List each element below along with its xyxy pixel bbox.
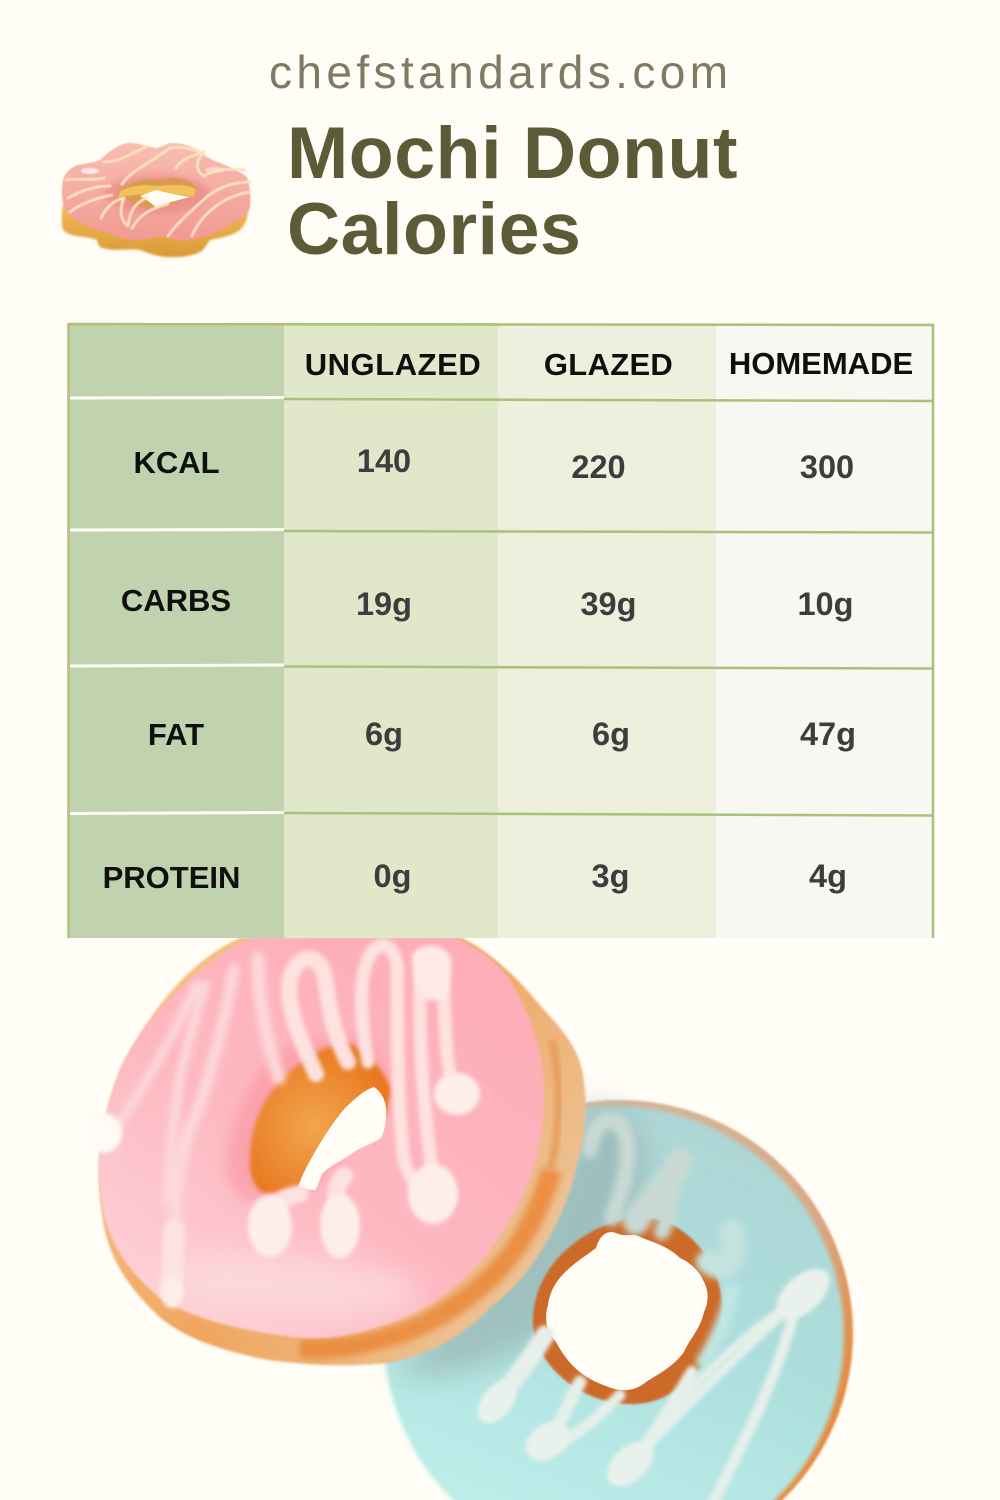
title: Mochi Donut xyxy=(287,111,738,194)
photo: pink glazed donut xyxy=(86,938,586,1365)
table columns background xyxy=(68,323,934,938)
row: kcal: KCAL xyxy=(133,445,220,480)
row: protein: 3g xyxy=(592,858,629,894)
row: protein xyxy=(103,858,847,895)
table grid lines xyxy=(68,323,934,938)
column headings: UNGLAZED xyxy=(305,347,481,382)
row: fat: 6g xyxy=(592,716,630,752)
row: fat: FAT xyxy=(148,717,204,752)
row: carbs xyxy=(121,583,854,622)
row: protein: 0g xyxy=(374,858,411,894)
row: carbs: 10g xyxy=(797,586,854,622)
icon: small pink mochi donut xyxy=(62,143,250,257)
column headings: GLAZED xyxy=(544,347,673,382)
row: fat xyxy=(148,716,856,752)
column headings: HOMEMADE xyxy=(729,346,913,381)
row: carbs: CARBS xyxy=(121,583,231,618)
row: kcal: 140 xyxy=(357,443,411,479)
row: protein: 4g xyxy=(809,858,847,894)
column headings xyxy=(305,346,913,382)
row: fat: 6g xyxy=(365,716,403,752)
title: Calories xyxy=(287,187,581,270)
row: kcal: 220 xyxy=(571,449,626,485)
row: fat: 47g xyxy=(800,716,856,752)
panel: nutrition table xyxy=(68,323,934,938)
row: kcal xyxy=(133,443,854,485)
row: carbs: 39g xyxy=(580,586,637,622)
row: kcal: 300 xyxy=(800,449,854,485)
title xyxy=(287,111,738,270)
photo: blue glazed donut xyxy=(384,1100,853,1500)
row: protein: PROTEIN xyxy=(103,860,240,895)
website name: chefstandards.com xyxy=(269,46,732,98)
row: carbs: 19g xyxy=(356,586,412,622)
